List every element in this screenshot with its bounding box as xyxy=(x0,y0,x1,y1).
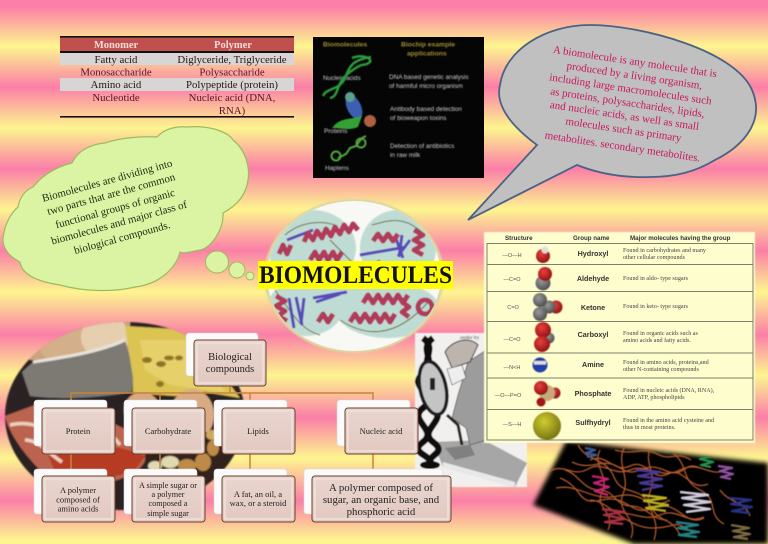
thought cloud text: Biomolecules are dividing into xyxy=(41,157,174,205)
protein structure ball xyxy=(264,199,444,353)
detective cartoon xyxy=(415,333,527,487)
speech bubble text: and nucleic acids, as well as small xyxy=(549,99,700,133)
thought cloud text: biological compounds. xyxy=(73,219,172,257)
biochip column headings: Biochip example xyxy=(401,42,455,48)
speech bubble text: produced by a living organism, xyxy=(566,60,703,92)
group descriptions: Found in carbohydrates and many xyxy=(623,248,707,254)
structural formulas: —S—H xyxy=(503,422,521,428)
group names: Amine xyxy=(582,360,604,369)
thought cloud text: functional groups of organic xyxy=(54,187,176,231)
biochip descriptions: in raw milk xyxy=(390,152,421,159)
group descriptions: other cellular compounds xyxy=(623,255,686,261)
speech bubble text: metabolites. secondary metabolites. xyxy=(544,129,701,165)
table body text: Polypeptide (protein) xyxy=(186,79,278,91)
node: Biological compounds xyxy=(186,333,266,386)
structural formulas: —O—P=O xyxy=(495,393,522,399)
food: eggs front xyxy=(122,388,214,434)
cartoon: bench xyxy=(433,440,527,487)
biochip descriptions: Nucleic acids xyxy=(323,75,361,82)
node: nucleic acid description: phosphoric acid xyxy=(347,506,416,518)
organization chart xyxy=(34,333,451,522)
table header text xyxy=(94,40,252,51)
biochip applications image xyxy=(313,37,484,178)
group descriptions: amino acids and fatty acids. xyxy=(623,337,691,344)
structural formulas: —C=O xyxy=(504,277,521,283)
biochip descriptions: DNA based genetic analysis xyxy=(389,74,469,81)
table body text: Nucleic acid (DNA, xyxy=(189,92,276,104)
speech bubble definition xyxy=(468,25,756,220)
group names: Phosphate xyxy=(575,389,611,398)
structural formulas: —N<H xyxy=(504,365,520,371)
functional table header: Structure xyxy=(505,235,533,242)
ribosome: coloured clusters xyxy=(585,445,752,539)
biochip column headings xyxy=(323,42,455,58)
group descriptions: Found in the amino acid cysteine and xyxy=(623,418,714,424)
node: Carbohydrate xyxy=(124,400,205,454)
table body text: Monosaccharide xyxy=(80,66,152,78)
food: metal sieve xyxy=(22,340,134,398)
node: Nucleic acid xyxy=(337,400,418,454)
table body text: Diglyceride, Triglyceride xyxy=(177,54,287,66)
ribosome structure image xyxy=(533,441,768,544)
biochip column headings: Biomolecules xyxy=(323,42,367,48)
table header text: Monomer xyxy=(94,40,138,51)
food: cheese xyxy=(125,326,240,398)
node: Biological compounds: compounds xyxy=(206,364,254,375)
biochip descriptions xyxy=(323,74,469,172)
monomer and polymer table xyxy=(60,36,294,118)
functional table header: Group name xyxy=(573,235,610,242)
cartoon: DNA column xyxy=(418,338,438,466)
node: Biological compounds: Biological xyxy=(208,352,252,363)
biochip descriptions: of bioweapon toxins xyxy=(390,115,446,122)
node: lipid description xyxy=(214,469,295,522)
group descriptions: ADP, ATP, phospholipids xyxy=(623,395,685,401)
node: Lipids: Lipids xyxy=(247,426,269,436)
food photograph xyxy=(0,315,250,515)
node: carbohydrate description: composed a xyxy=(149,499,188,508)
group names: Ketone xyxy=(581,303,605,312)
node: nucleic acid description xyxy=(304,469,451,522)
structural formulas: C=O xyxy=(507,305,519,311)
node: lipid description: A fat, an oil, a xyxy=(234,489,282,499)
node: protein description xyxy=(34,469,115,522)
functional table header: Major molecules having the group xyxy=(630,235,731,242)
space-filling molecule icons xyxy=(532,246,562,440)
cartoon: caption: under by xyxy=(460,335,480,341)
food: cheese holes xyxy=(142,356,183,387)
title banner: BIOMOLECULES xyxy=(259,262,452,289)
node: nucleic acid description: A polymer composed of xyxy=(329,482,433,494)
group descriptions: Found in amino acids, proteins,and xyxy=(623,360,709,366)
table body text: Nucleotide xyxy=(92,92,140,104)
cartoon: detective figure xyxy=(452,350,486,445)
table body text: Amino acid xyxy=(91,79,142,91)
structural formulas: —O—H xyxy=(502,253,522,259)
node: Carbohydrate: Carbohydrate xyxy=(145,426,191,436)
protein ribbons: sheets xyxy=(287,230,410,328)
node: carbohydrate description: a polymer xyxy=(152,490,185,499)
table body text xyxy=(80,54,287,117)
node: lipid description: wax, or a steroid xyxy=(230,498,287,508)
group descriptions: Found in aldo- type sugars xyxy=(623,276,689,282)
node: Lipids xyxy=(214,400,295,454)
biochip descriptions: of harmful micro organism xyxy=(389,83,463,90)
functional table header xyxy=(505,235,731,242)
table body text: Fatty acid xyxy=(95,54,138,66)
ribosome: orange strands xyxy=(548,445,750,540)
speech bubble text: molecules such as primary xyxy=(565,115,683,145)
biochip descriptions: Antibody based detection xyxy=(390,106,462,113)
group names: Hydroxyl xyxy=(578,249,608,258)
group names: Sulfhydryl xyxy=(575,418,611,427)
group descriptions: thus in most proteins. xyxy=(623,425,676,431)
protein ribbons: helices xyxy=(276,224,432,322)
node: protein description: amino acids xyxy=(58,504,98,514)
group descriptions: Found in keto- type sugars xyxy=(623,304,689,310)
structural formulas: —C=O xyxy=(504,337,521,343)
speech bubble text xyxy=(544,44,718,165)
node: Nucleic acid: Nucleic acid xyxy=(360,426,403,436)
group names: Carboxyl xyxy=(578,330,608,339)
speech bubble text: as proteins, polysaccharides, lipids, xyxy=(550,86,706,121)
cartoon: magnifying glass xyxy=(415,359,451,417)
food: eggs xyxy=(28,321,132,362)
biochip descriptions: Proteins xyxy=(324,128,347,135)
node: nucleic acid description: sugar, an organic base, and xyxy=(323,494,440,506)
group descriptions: other N-containing compounds xyxy=(623,367,699,373)
functional groups table xyxy=(484,232,755,443)
food: nuts xyxy=(145,430,230,482)
group names xyxy=(575,249,611,427)
thought cloud xyxy=(3,127,254,291)
group descriptions xyxy=(623,248,715,431)
node: carbohydrate description: A simple sugar or xyxy=(139,481,197,490)
thought bubble dots xyxy=(206,251,254,280)
icon: DNA helix xyxy=(323,56,371,98)
biochip descriptions: Detection of antibiotics xyxy=(390,143,454,150)
node: Protein xyxy=(34,400,115,454)
protein loops xyxy=(275,221,430,335)
thought cloud text: two parts that are the common xyxy=(46,171,177,218)
biochip descriptions: Haptens xyxy=(325,165,349,172)
table body text: RNA) xyxy=(219,105,246,117)
node: carbohydrate description: simple sugar xyxy=(147,509,189,518)
group descriptions: Found in nucleic acids (DNA, RNA), xyxy=(623,387,715,394)
group descriptions: Found in organic acids such as xyxy=(623,331,698,337)
node: protein description: A polymer xyxy=(60,485,96,495)
structural formulas xyxy=(495,253,522,428)
node: Protein: Protein xyxy=(66,426,91,436)
thought cloud text: biomolecules and major class of xyxy=(50,199,189,248)
thought cloud text xyxy=(41,157,189,257)
chart connectors xyxy=(71,386,373,470)
group names: Aldehyde xyxy=(577,274,609,283)
node: carbohydrate description xyxy=(124,469,205,522)
node: protein description: composed of xyxy=(56,494,100,504)
icon: protein blob xyxy=(332,92,376,129)
speech bubble text: A biomolecule is any molecule that is xyxy=(552,44,718,80)
icon: hapten molecule xyxy=(332,136,366,160)
food: raw meat xyxy=(5,405,146,485)
biochip column headings: applications xyxy=(407,50,447,58)
protein surface xyxy=(267,210,440,338)
table header text: Polymer xyxy=(214,40,252,51)
speech bubble text: including large macromolecules such xyxy=(549,71,713,108)
table body text: Polysaccharide xyxy=(199,66,265,78)
